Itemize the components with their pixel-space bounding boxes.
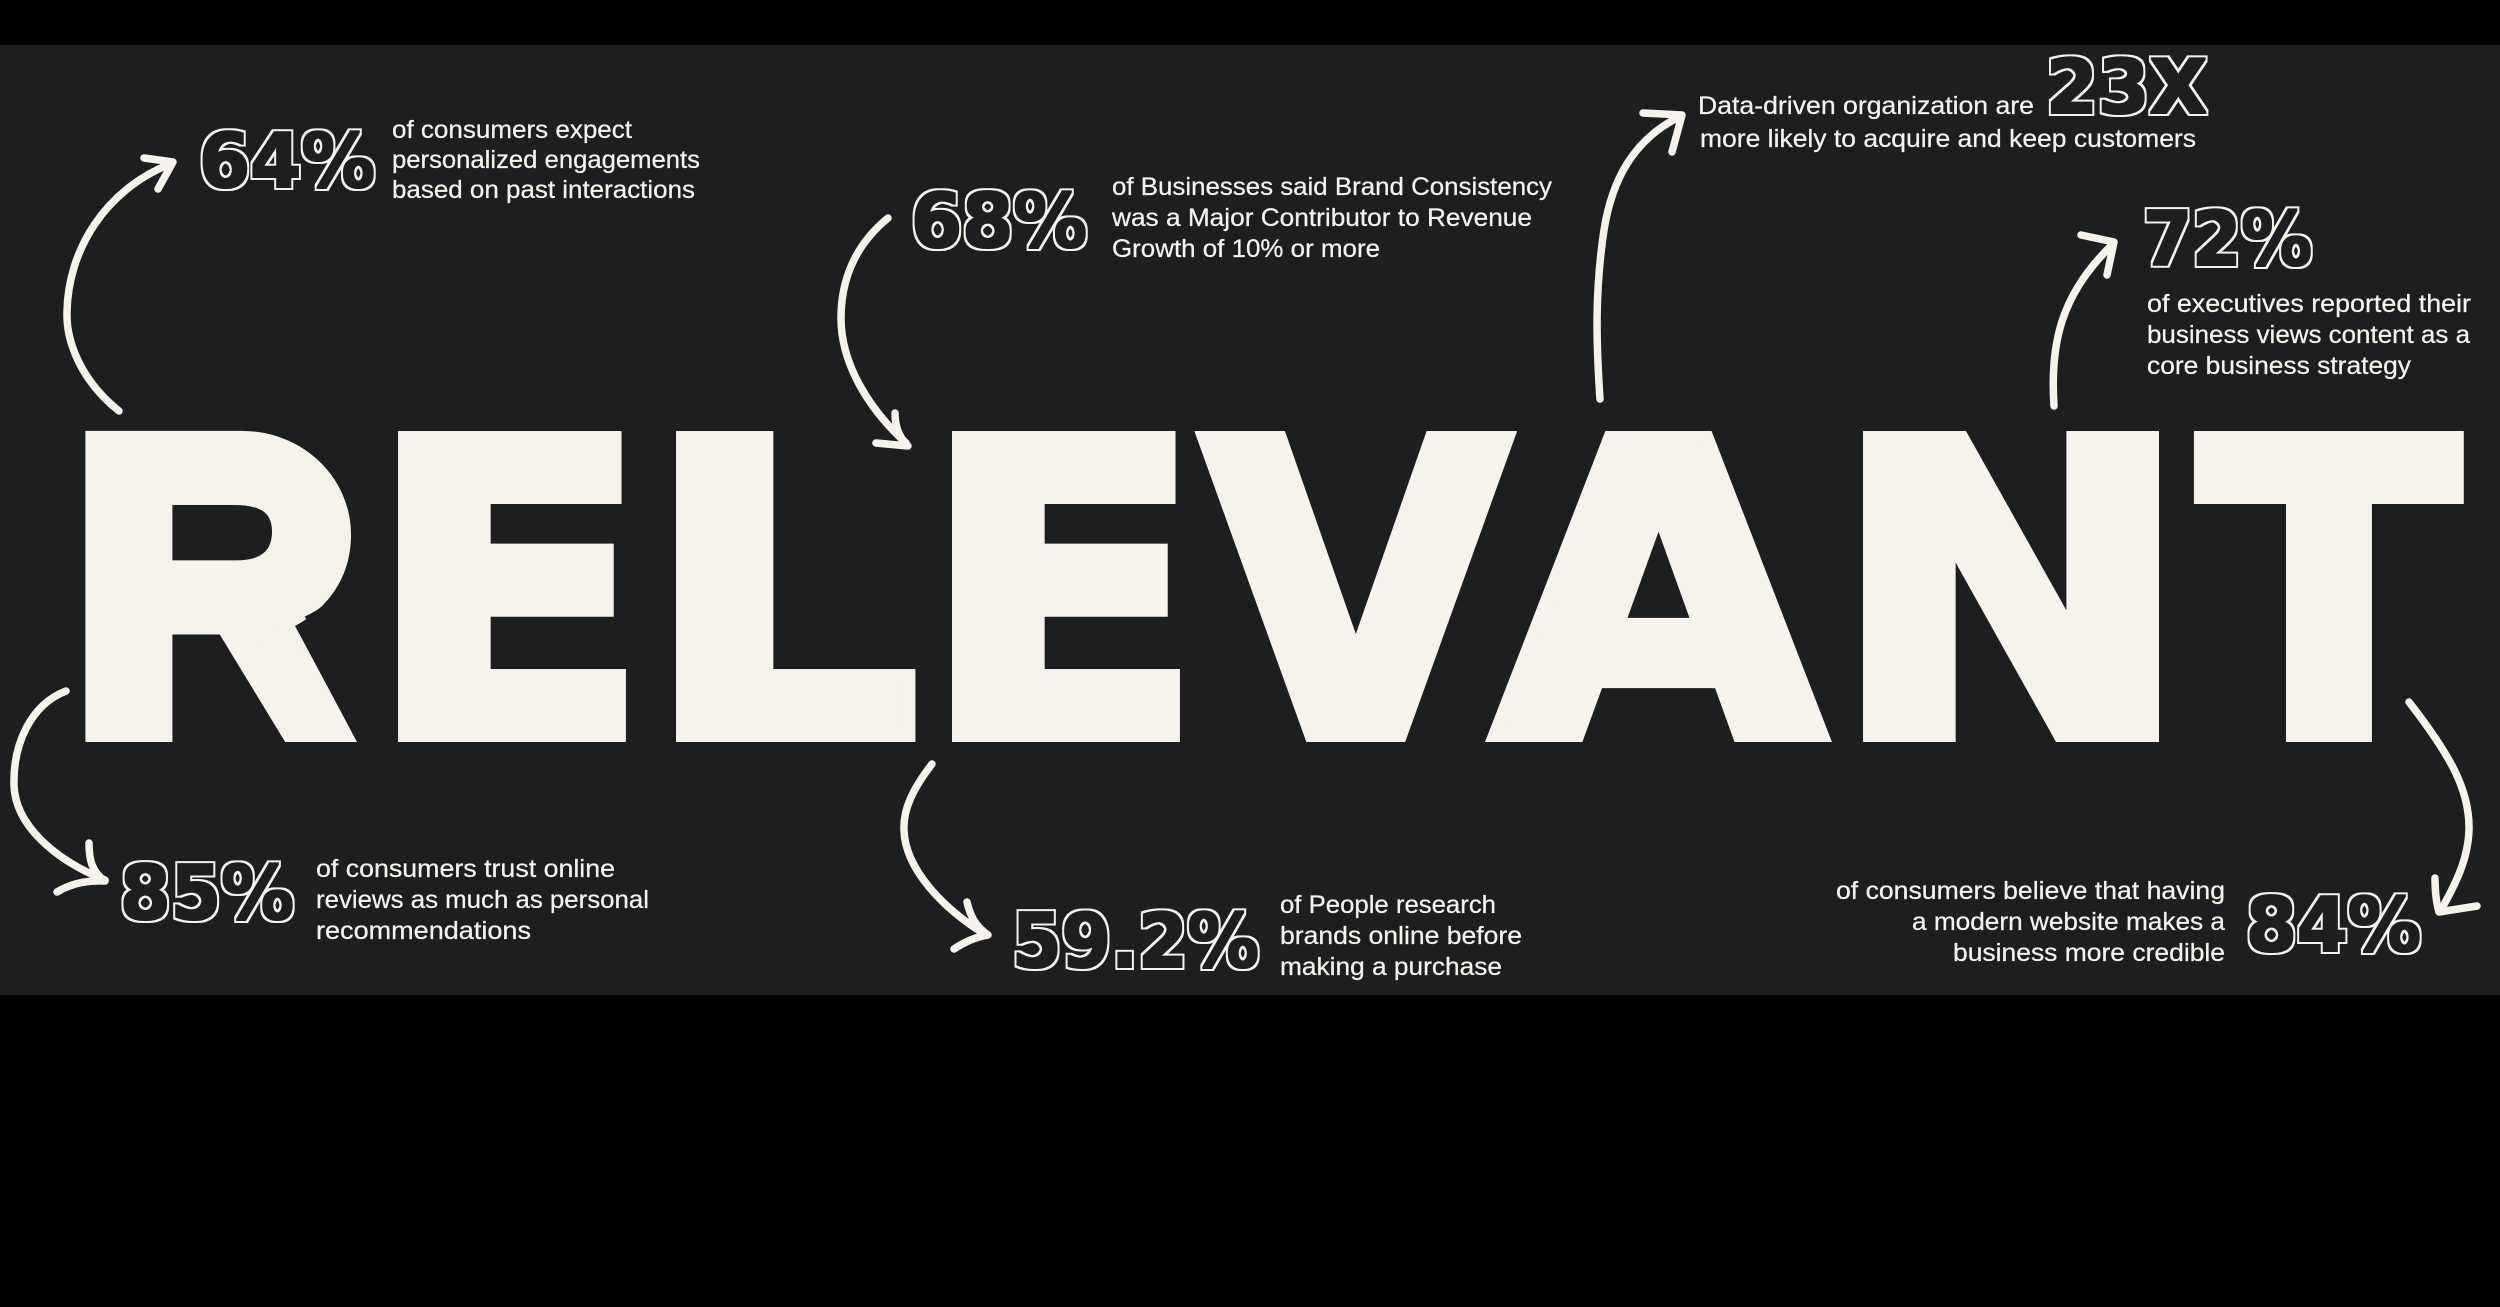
arrow to 59.2% xyxy=(904,764,988,949)
description 72% xyxy=(2147,290,2471,380)
description 68%: of Businesses said Brand Consistency xyxy=(1112,173,1553,201)
arrow to 84% xyxy=(2409,702,2477,912)
title: RELEVANT: E xyxy=(368,359,648,831)
stat: 68% xyxy=(841,173,1553,446)
description 64% xyxy=(392,116,700,204)
number 85%: 85% xyxy=(120,849,294,937)
number 68%: 68% xyxy=(911,177,1087,265)
description 85%: reviews as much as personal xyxy=(316,886,649,914)
title: RELEVANT: T xyxy=(2199,358,2461,830)
description 59.2%: brands online before xyxy=(1280,922,1522,950)
title: RELEVANT xyxy=(72,355,2461,831)
stat: 85% xyxy=(14,691,649,945)
number 23X: 23X xyxy=(2046,43,2207,131)
description 68%: Growth of 10% or more xyxy=(1112,235,1380,263)
description 59.2% xyxy=(1280,891,1522,981)
stat: 23X xyxy=(1597,43,2207,399)
description 59.2%: making a purchase xyxy=(1280,953,1502,981)
description 23X: Data-driven organization are xyxy=(1698,92,2034,120)
description 68% xyxy=(1111,173,1553,263)
description 64%: of consumers expect xyxy=(392,116,632,144)
description 85% xyxy=(316,855,649,945)
description 72%: business views content as a xyxy=(2147,321,2470,349)
number 59.2%: 59.2% xyxy=(1012,897,1259,985)
description 64%: based on past interactions xyxy=(392,176,695,204)
stat: 72% xyxy=(2053,195,2471,406)
description 84% xyxy=(1836,877,2225,967)
arrow to 64% xyxy=(67,158,173,411)
description 84%: of consumers believe that having xyxy=(1836,877,2225,905)
title: RELEVANT: N xyxy=(1832,359,2190,831)
description 23X xyxy=(1698,92,2196,153)
arrow to 85% xyxy=(14,691,105,892)
arrow to 23X xyxy=(1597,113,1682,399)
description 84%: a modern website makes a xyxy=(1912,908,2225,936)
dark background panel xyxy=(0,45,2500,995)
description 64%: personalized engagements xyxy=(392,146,700,174)
stat: 59.2% xyxy=(904,764,1522,985)
title: RELEVANT: E xyxy=(922,359,1202,831)
number 64%: 64% xyxy=(199,117,375,205)
title: RELEVANT: V xyxy=(1203,359,1511,831)
title: RELEVANT: R xyxy=(72,355,368,815)
description 68%: was a Major Contributor to Revenue xyxy=(1111,204,1532,232)
description 85%: recommendations xyxy=(316,917,531,945)
description 85%: of consumers trust online xyxy=(316,855,615,883)
stat: 64% xyxy=(67,116,700,411)
description 72%: of executives reported their xyxy=(2147,290,2471,318)
description 59.2%: of People research xyxy=(1280,891,1496,919)
arrow to 72% xyxy=(2053,235,2114,406)
description 23X: more likely to acquire and keep customers xyxy=(1700,125,2196,153)
number 84%: 84% xyxy=(2246,881,2421,969)
arrow to 68% xyxy=(841,218,908,446)
stat: 84% xyxy=(1836,702,2477,969)
number 72%: 72% xyxy=(2143,195,2312,283)
description 72%: core business strategy xyxy=(2147,352,2412,380)
description 84%: business more credible xyxy=(1953,939,2225,967)
title: RELEVANT: A xyxy=(1494,358,1826,830)
title: RELEVANT: L xyxy=(645,358,919,830)
